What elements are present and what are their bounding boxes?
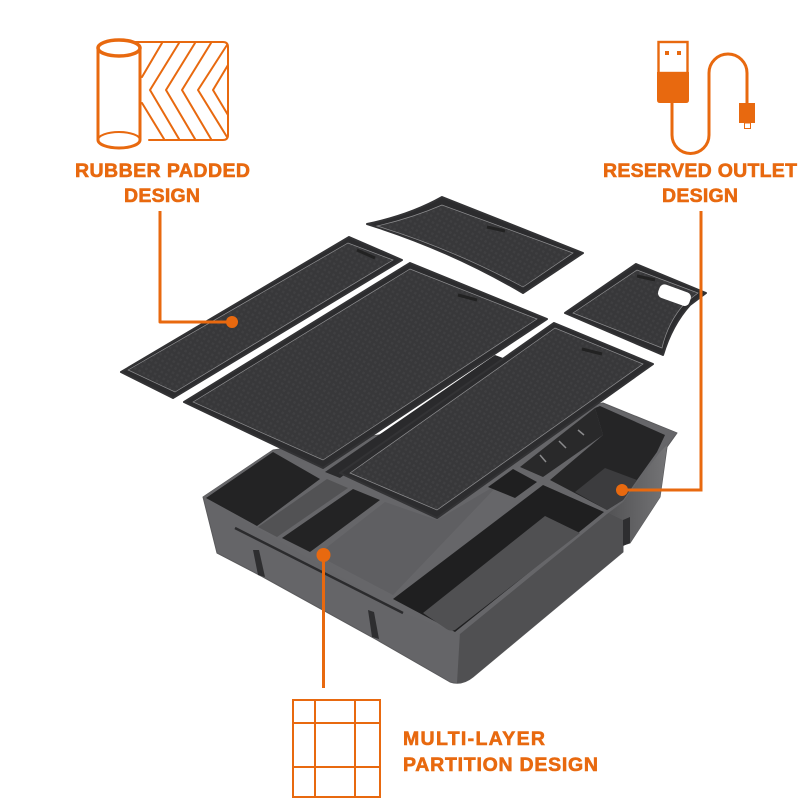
compartment: black channel bbox=[282, 489, 380, 552]
heading: multi-layer partition design bbox=[403, 728, 598, 776]
heading: reserved outlet design: DESIGN bbox=[662, 185, 738, 207]
tray notches bbox=[253, 517, 630, 639]
pad: left strip bbox=[121, 237, 402, 398]
tray front rim bar bbox=[235, 528, 403, 613]
pad: small with outlet hole bbox=[565, 264, 706, 355]
pad: top bbox=[367, 197, 583, 293]
compartment: left large bbox=[206, 452, 320, 526]
compartment: outlet bay bbox=[550, 406, 665, 510]
callout: reserved outlet leader bbox=[616, 211, 701, 496]
tray outer walls bbox=[203, 403, 677, 683]
heading: reserved outlet design: RESERVED OUTLET bbox=[603, 160, 797, 182]
icon: rubber roll bbox=[98, 40, 228, 148]
pad: front right bbox=[340, 323, 653, 518]
callout: rubber padded leader bbox=[160, 211, 238, 328]
heading: rubber padded design bbox=[75, 160, 250, 207]
compartment: open floor bbox=[317, 483, 500, 595]
tray bbox=[203, 403, 677, 683]
callout: multi-layer leader bbox=[316, 548, 330, 688]
heading: reserved outlet design bbox=[603, 160, 797, 207]
tray right wall bbox=[457, 512, 623, 683]
tray back strip between pads bbox=[325, 355, 503, 478]
heading: rubber padded design: RUBBER PADDED bbox=[75, 160, 250, 182]
tray top deck bbox=[203, 403, 677, 634]
compartment: ribbed slot bbox=[520, 408, 603, 477]
icon: usb cable bbox=[657, 42, 755, 154]
icon: partition grid bbox=[293, 700, 380, 797]
heading: multi-layer partition design: PARTITION DESIGN bbox=[403, 754, 598, 776]
heading: rubber padded design: DESIGN bbox=[124, 185, 200, 207]
compartment: grey channel bbox=[258, 479, 348, 537]
tray end wall bbox=[607, 445, 667, 545]
pad: centre large bbox=[184, 263, 547, 468]
compartment: long front bbox=[393, 485, 604, 632]
compartment: small square bbox=[488, 469, 537, 498]
heading: multi-layer partition design: MULTI-LAYER bbox=[403, 728, 545, 750]
